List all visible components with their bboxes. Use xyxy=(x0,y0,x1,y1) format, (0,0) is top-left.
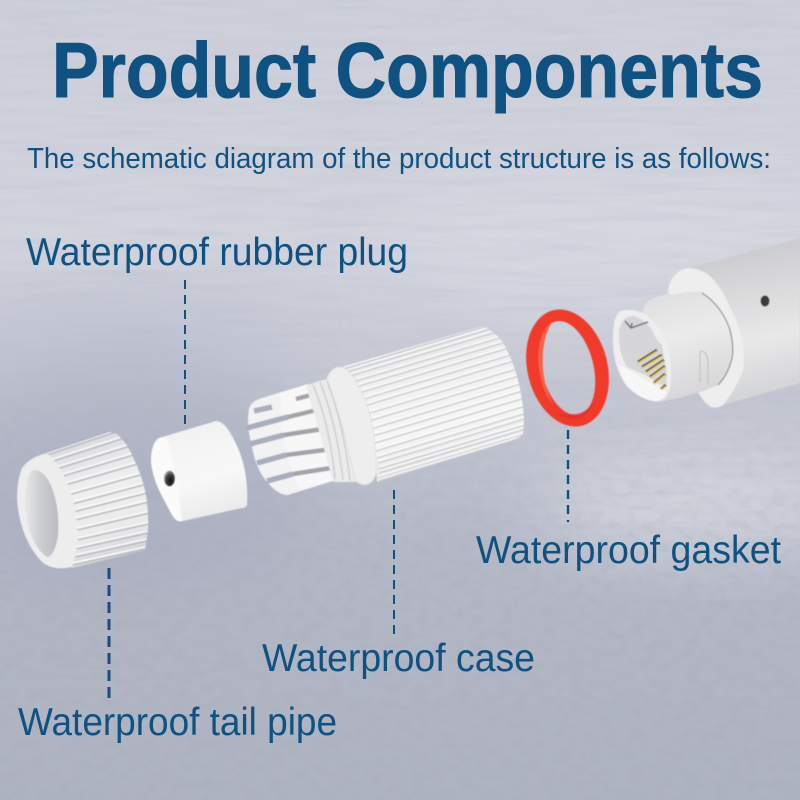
groove arc xyxy=(702,293,733,385)
label: waterproof rubber plug: Waterproof rubber plug xyxy=(26,231,408,274)
plug cavity xyxy=(619,316,667,388)
gold contact pins xyxy=(638,350,666,391)
gasket inner wall shading xyxy=(538,321,553,404)
case fingers xyxy=(247,384,336,495)
dashed leader: tail pipe xyxy=(108,568,110,702)
connector tube xyxy=(690,238,800,405)
plug centre hole xyxy=(164,470,175,486)
component: waterproof gasket xyxy=(514,301,621,435)
connector neck xyxy=(630,292,733,402)
front ring of tail pipe xyxy=(17,453,78,568)
case threads xyxy=(306,379,358,482)
label: waterproof gasket: Waterproof gasket xyxy=(476,529,781,572)
case flange xyxy=(327,367,376,485)
component: waterproof case xyxy=(247,326,524,496)
tube side hole xyxy=(760,296,770,306)
component: waterproof rubber plug xyxy=(151,421,247,521)
ribbed case body xyxy=(342,326,524,482)
label: waterproof tail pipe: Waterproof tail pipe xyxy=(18,701,337,744)
subtitle: The schematic diagram of the product structure is as follows: xyxy=(27,143,771,175)
plug front opening xyxy=(613,310,671,402)
label: waterproof case: Waterproof case xyxy=(262,637,535,680)
dashed leader: rubber plug xyxy=(184,280,186,425)
component: waterproof tail pipe xyxy=(16,432,149,569)
dashed leader: gasket xyxy=(567,430,569,522)
dashed leader: case xyxy=(393,490,395,636)
component: connector body with RJ45 plug xyxy=(613,238,800,408)
neck slot xyxy=(700,351,708,384)
plug lower lip xyxy=(620,365,666,401)
connector flange xyxy=(668,268,744,408)
tail pipe bore xyxy=(25,470,58,557)
gasket bottom highlight xyxy=(553,402,594,419)
plug end face shading xyxy=(151,437,182,521)
RJ45 latch clip xyxy=(625,321,648,328)
